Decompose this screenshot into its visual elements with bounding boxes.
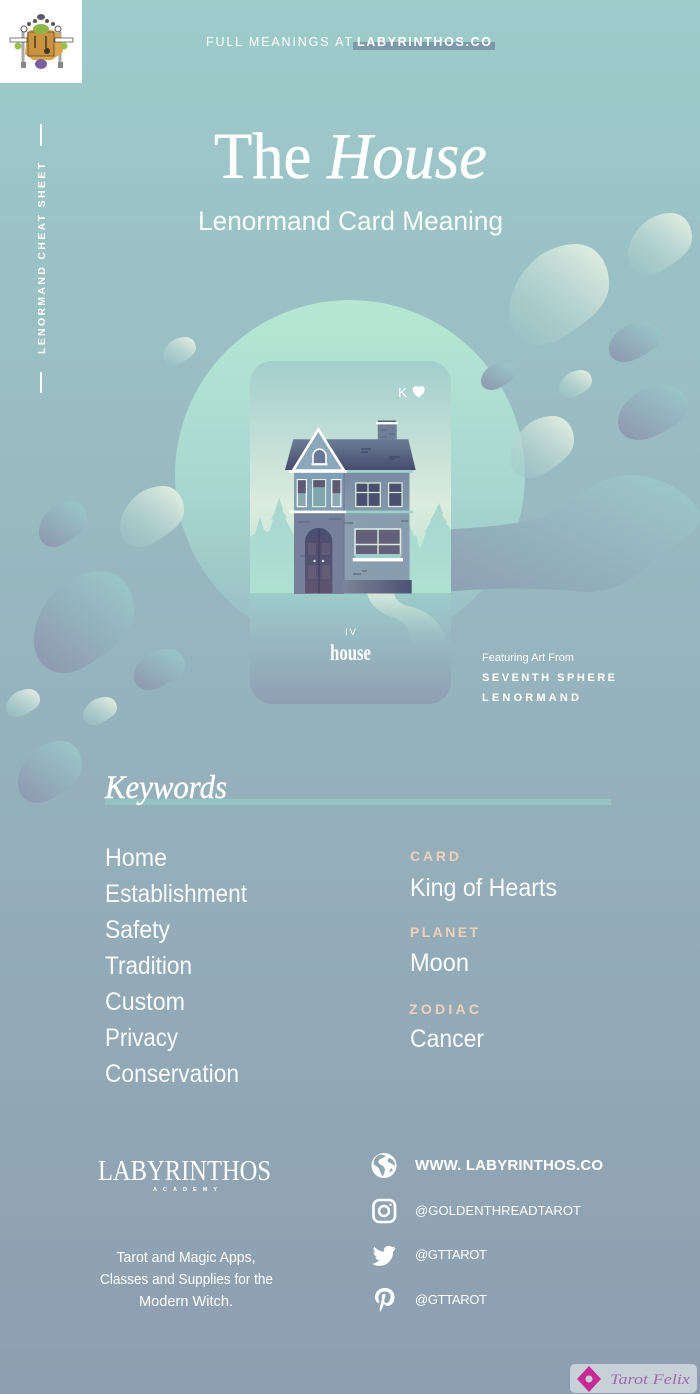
header link: LABYRINTHOS.CO bbox=[357, 35, 491, 49]
icon: globe bbox=[372, 1153, 396, 1178]
tarot felix badge: Tarot Felix bbox=[610, 1372, 690, 1388]
zodiac association: ZODIAC bbox=[409, 1001, 479, 1017]
keyword list bbox=[105, 844, 247, 1088]
academy logo: ACADEMY bbox=[153, 1187, 217, 1193]
card name: house bbox=[330, 640, 371, 665]
winding path bbox=[367, 593, 447, 645]
card numeral: IV bbox=[345, 627, 357, 638]
planet association: Moon bbox=[410, 949, 469, 977]
zodiac association: Cancer bbox=[410, 1025, 484, 1053]
academy tagline: Tarot and Magic Apps, bbox=[116, 1249, 256, 1266]
keyword list: Home bbox=[105, 844, 167, 872]
planet association: PLANET bbox=[410, 924, 478, 940]
title: The House bbox=[214, 120, 487, 193]
large hill blob bbox=[440, 475, 700, 592]
keywords underline bbox=[105, 799, 611, 805]
side label: LENORMAND CHEAT SHEET bbox=[36, 162, 48, 354]
pinterest handle: @GTTAROT bbox=[415, 1292, 487, 1307]
art credit: SEVENTH SPHERE bbox=[482, 672, 615, 684]
header link bbox=[206, 35, 495, 50]
twitter handle: @GTTAROT bbox=[415, 1247, 487, 1262]
academy tagline: Modern Witch. bbox=[139, 1293, 233, 1310]
logo tile: crest bbox=[0, 0, 82, 83]
floating pebbles bbox=[6, 213, 692, 803]
card rank and suit bbox=[398, 385, 425, 400]
keyword list: Custom bbox=[105, 988, 185, 1016]
keyword list: Conservation bbox=[105, 1060, 239, 1088]
card rank and suit: K bbox=[398, 385, 407, 400]
forest bbox=[250, 498, 451, 593]
header link: FULL MEANINGS AT bbox=[206, 35, 352, 49]
house illustration bbox=[285, 420, 416, 594]
academy tagline: Classes and Supplies for the bbox=[100, 1271, 273, 1288]
keyword list: Privacy bbox=[105, 1024, 178, 1052]
icon: instagram bbox=[374, 1200, 395, 1222]
art credit: Featuring Art From bbox=[482, 652, 574, 664]
academy tagline bbox=[100, 1249, 273, 1310]
keyword list: Safety bbox=[105, 916, 170, 944]
card sky bbox=[250, 361, 451, 594]
card association: King of Hearts bbox=[410, 874, 557, 902]
art credit: LENORMAND bbox=[482, 692, 579, 704]
keywords heading: Keywords bbox=[104, 770, 227, 806]
planet association bbox=[410, 924, 478, 977]
website link: WWW. LABYRINTHOS.CO bbox=[415, 1157, 603, 1174]
academy logo: LABYRINTHOS bbox=[98, 1156, 271, 1187]
tarot felix badge bbox=[570, 1364, 697, 1393]
card ground bbox=[250, 593, 451, 704]
zodiac association bbox=[409, 1001, 484, 1053]
icon: pinterest bbox=[375, 1288, 394, 1312]
keyword list: Establishment bbox=[105, 880, 247, 908]
card association bbox=[410, 848, 557, 902]
icon: twitter bbox=[372, 1246, 396, 1266]
tarot card bbox=[250, 361, 451, 704]
keyword list: Tradition bbox=[105, 952, 192, 980]
card association: CARD bbox=[410, 848, 459, 864]
art credit bbox=[482, 652, 615, 704]
sun circle bbox=[175, 300, 525, 650]
instagram handle: @GOLDENTHREADTAROT bbox=[415, 1203, 581, 1218]
subtitle: Lenormand Card Meaning bbox=[198, 206, 503, 236]
